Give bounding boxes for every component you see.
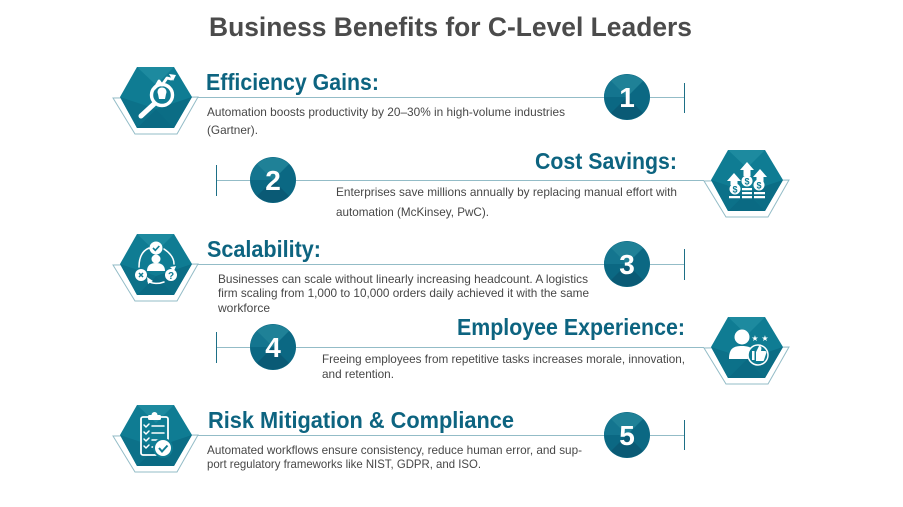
panel: risk mitigation and compliance bbox=[113, 405, 684, 472]
body text: workforce bbox=[217, 301, 270, 315]
panel: employee experience bbox=[216, 314, 789, 384]
hexagon icon: clipboard checklist bbox=[113, 405, 198, 472]
body text: Automated workflows ensure consistency, reduce human error, and sup- bbox=[207, 443, 582, 457]
connector line 1 bbox=[198, 96, 684, 98]
end tick 3 bbox=[684, 249, 686, 280]
number badge 1: 1 bbox=[619, 82, 635, 113]
heading: Cost Savings: bbox=[535, 148, 677, 174]
title: Business Benefits for C-Level Leaders bbox=[209, 12, 692, 42]
end tick 2 bbox=[216, 165, 218, 196]
body text: port regulatory frameworks like NIST, GDPR, and ISO. bbox=[207, 457, 481, 471]
connector line 5 bbox=[198, 434, 684, 436]
number badge 4: 4 bbox=[265, 332, 281, 363]
body text: automation (McKinsey, PwC). bbox=[336, 205, 489, 219]
body text: Businesses can scale without linearly increasing headcount. A logistics bbox=[218, 272, 588, 286]
hexagon icon: employee with thumbs up bbox=[704, 317, 789, 384]
panel: efficiency gains bbox=[113, 67, 684, 137]
body text bbox=[207, 105, 565, 137]
number badge 3 bbox=[604, 241, 650, 287]
hexagon icon: rising coins: $ bbox=[744, 176, 750, 186]
heading: Employee Experience: bbox=[457, 314, 685, 340]
heading: Efficiency Gains: bbox=[206, 69, 379, 95]
panel: scalability bbox=[113, 234, 684, 315]
body text bbox=[217, 272, 589, 315]
body text: and retention. bbox=[322, 367, 394, 381]
end tick 1 bbox=[684, 83, 686, 113]
hexagon icon: rising coins: $ bbox=[732, 184, 738, 194]
connector line 3 bbox=[198, 264, 684, 266]
number badge 4 bbox=[250, 324, 296, 370]
number badge 2: 2 bbox=[265, 165, 281, 196]
heading: Risk Mitigation & Compliance bbox=[208, 407, 514, 433]
body text bbox=[207, 443, 582, 471]
number badge 3: 3 bbox=[619, 249, 635, 280]
hexagon icon: rising coins bbox=[704, 150, 789, 217]
end tick 4 bbox=[216, 332, 218, 363]
number badge 2 bbox=[250, 157, 296, 203]
hexagon icon: rising coins: $ bbox=[756, 180, 762, 190]
body text: (Gartner). bbox=[207, 123, 258, 137]
number badge 5 bbox=[604, 412, 650, 458]
body text bbox=[336, 185, 677, 219]
end tick 5 bbox=[684, 420, 686, 450]
connector line 4 bbox=[216, 346, 704, 348]
hexagon icon: person with cycle arrows bbox=[113, 234, 198, 301]
hexagon icon: magnifier with lightbulb bbox=[113, 67, 198, 134]
hexagon icon: employee with thumbs up: ★ bbox=[751, 334, 759, 343]
heading: Scalability: bbox=[207, 236, 321, 262]
body text: firm scaling from 1,000 to 10,000 orders daily achieved it with the same bbox=[218, 286, 589, 300]
body text bbox=[322, 352, 685, 381]
panel: cost savings bbox=[216, 148, 789, 219]
number badge 1 bbox=[604, 74, 650, 120]
body text: Automation boosts productivity by 20–30% in high-volume industries bbox=[207, 105, 565, 119]
hexagon icon: person with cycle arrows: ? bbox=[168, 271, 174, 282]
connector line 2 bbox=[216, 180, 704, 182]
body text: Freeing employees from repetitive tasks increases morale, innovation, bbox=[322, 352, 685, 366]
number badge 5: 5 bbox=[619, 420, 635, 451]
hexagon icon: employee with thumbs up: ★ bbox=[761, 334, 769, 343]
body text: Enterprises save millions annually by replacing manual effort with bbox=[336, 185, 677, 199]
